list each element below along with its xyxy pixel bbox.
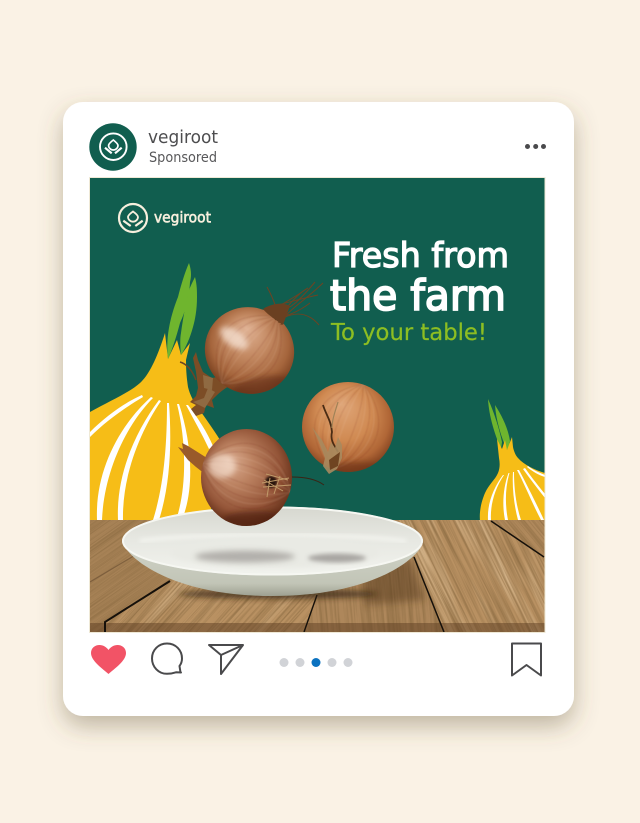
icon: more options xyxy=(525,144,546,149)
panel: advert image xyxy=(90,178,544,632)
green background xyxy=(90,178,544,521)
brand name: vegiroot xyxy=(154,208,211,226)
photo: right onion xyxy=(302,382,394,474)
headline: the farm xyxy=(330,271,506,320)
root plate xyxy=(265,476,277,488)
carousel dots xyxy=(280,658,352,667)
photo: top onion xyxy=(180,282,323,416)
panel: post card xyxy=(63,102,574,716)
sponsored label: Sponsored xyxy=(149,150,217,166)
icon: heart xyxy=(91,645,126,674)
icon: comment xyxy=(152,644,182,674)
icon: avatar logo xyxy=(89,123,137,171)
tagline: To your table! xyxy=(330,320,487,346)
brand logo xyxy=(119,204,211,232)
bulb xyxy=(201,429,292,526)
action bar xyxy=(91,644,541,676)
plate contact shadow xyxy=(178,589,378,599)
headline xyxy=(330,236,509,346)
illustration: small yellow onion xyxy=(480,399,545,521)
infographic: social media post mockup xyxy=(48,97,589,741)
shadow streak xyxy=(362,558,425,605)
image edge xyxy=(90,178,545,632)
header: account xyxy=(89,123,218,171)
icon: bookmark xyxy=(512,644,541,676)
plate xyxy=(122,506,423,596)
icon: brand mark xyxy=(119,204,147,232)
account name: vegiroot xyxy=(148,127,218,148)
root hairs xyxy=(265,282,323,325)
bulb xyxy=(204,307,294,394)
headline: Fresh from xyxy=(332,236,509,276)
bulb xyxy=(302,382,394,472)
bottom edge xyxy=(90,623,544,632)
illustration: large yellow onion xyxy=(90,263,220,521)
dry neck xyxy=(178,443,206,472)
icon: send xyxy=(209,645,243,674)
dry neck xyxy=(190,352,227,416)
photo: bottom onion xyxy=(178,429,324,529)
dry neck xyxy=(323,405,338,452)
wooden table xyxy=(90,520,544,632)
